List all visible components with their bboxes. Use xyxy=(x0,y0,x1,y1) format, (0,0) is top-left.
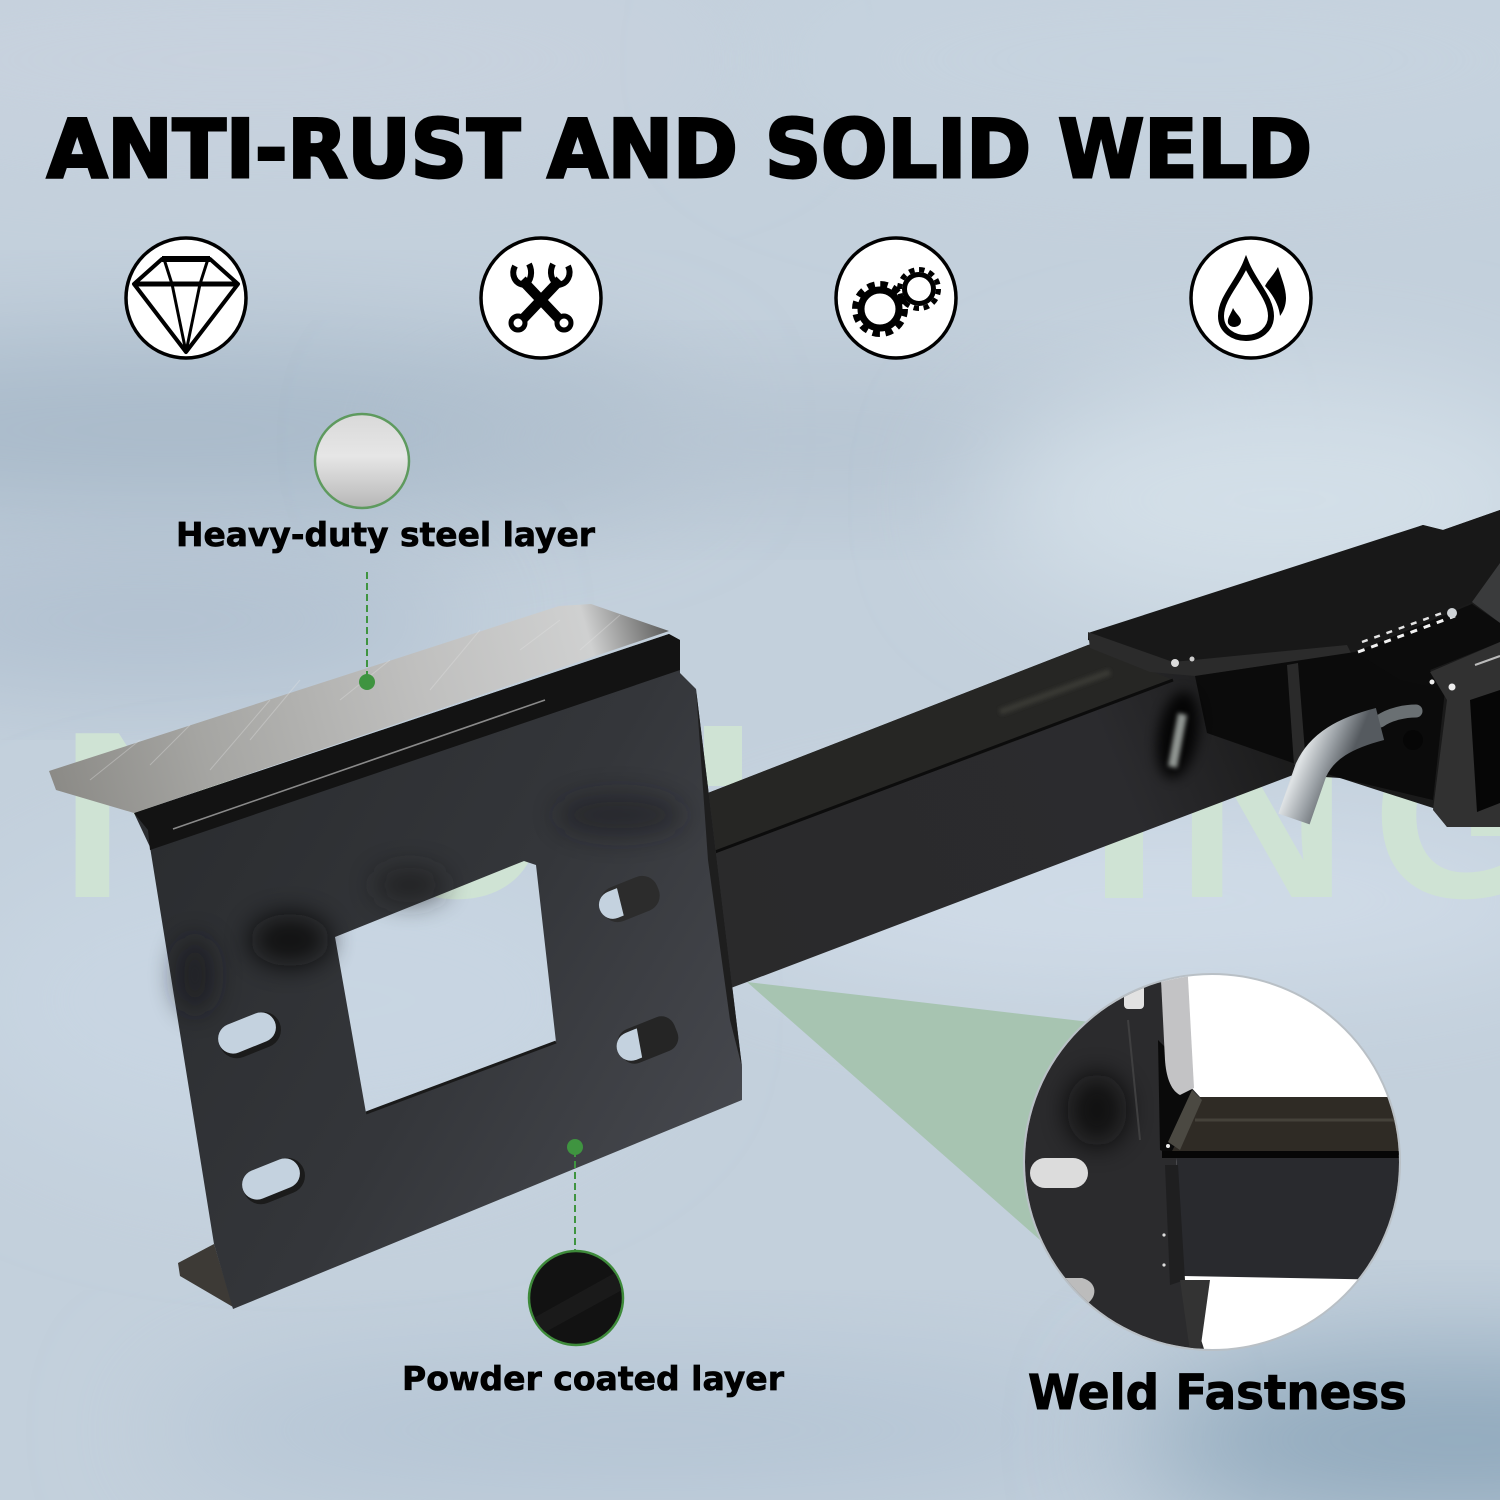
title: ANTI-RUST AND SOLID WELD xyxy=(47,103,1312,196)
tube base xyxy=(695,510,1500,992)
hole bottom edge xyxy=(366,1042,556,1113)
detail: black seam xyxy=(1162,1151,1400,1158)
receiver black top xyxy=(1355,604,1500,690)
weld detail magnifier xyxy=(1000,960,1400,1352)
callout: steel layer xyxy=(176,414,596,554)
watermark xyxy=(58,683,1500,948)
label: weld fastness: Weld Fastness xyxy=(1028,1365,1407,1421)
watermark: N xyxy=(58,683,248,948)
dashed leader: steel xyxy=(359,572,375,690)
receiver housing xyxy=(1430,642,1500,827)
front plate xyxy=(134,634,742,1309)
slot upper right xyxy=(594,871,665,928)
watermark: N xyxy=(1176,683,1348,948)
pin hole xyxy=(1403,730,1423,750)
icon: diamond xyxy=(126,238,246,358)
icon row xyxy=(126,238,1311,358)
gusset xyxy=(1472,563,1500,623)
slot lower right xyxy=(611,1012,683,1069)
detail: light side edge xyxy=(1161,976,1194,1095)
hitch pin xyxy=(1294,711,1416,819)
detail: tube upper xyxy=(1170,1097,1400,1155)
highlight beam xyxy=(747,982,1090,1240)
detail: weld xyxy=(1168,1090,1202,1150)
hitch: mounting bracket xyxy=(49,604,742,1309)
tube top flange xyxy=(695,645,1173,852)
plate front edge xyxy=(1088,632,1352,676)
weld bead xyxy=(1358,608,1457,652)
label: steel layer: Heavy-duty steel layer xyxy=(176,515,596,554)
slot upper left xyxy=(214,1006,286,1064)
detail: tube lower xyxy=(1176,1158,1400,1280)
icon: crossed wrenches xyxy=(481,238,601,358)
bracket side weld xyxy=(696,689,742,1067)
icon: water drops xyxy=(1191,238,1311,358)
weld shine xyxy=(1151,656,1205,782)
black under-plate area xyxy=(1195,652,1445,800)
fold band xyxy=(134,634,680,850)
detail: black inner corner xyxy=(1158,1040,1192,1151)
detail: plate xyxy=(1025,982,1204,1349)
lower lip xyxy=(178,1244,233,1307)
slot lower left xyxy=(238,1152,310,1210)
steel top face xyxy=(49,604,669,813)
label: powder coat layer: Powder coated layer xyxy=(402,1359,785,1398)
steel swatch xyxy=(315,414,409,508)
detail: lower flange xyxy=(1180,1280,1210,1352)
housing highlights xyxy=(1430,656,1500,690)
watermark: O xyxy=(365,683,550,948)
dashed leader: powder coat xyxy=(567,1139,583,1250)
top plate xyxy=(1088,510,1500,664)
powder coat swatch xyxy=(529,1251,623,1345)
hitch: receiver tube xyxy=(695,510,1500,992)
receiver opening xyxy=(1470,690,1500,812)
icon: gears xyxy=(836,238,956,358)
detail: slots xyxy=(1030,1158,1088,1188)
plate shadows xyxy=(250,914,330,966)
callout: powder coat layer xyxy=(402,1251,785,1398)
